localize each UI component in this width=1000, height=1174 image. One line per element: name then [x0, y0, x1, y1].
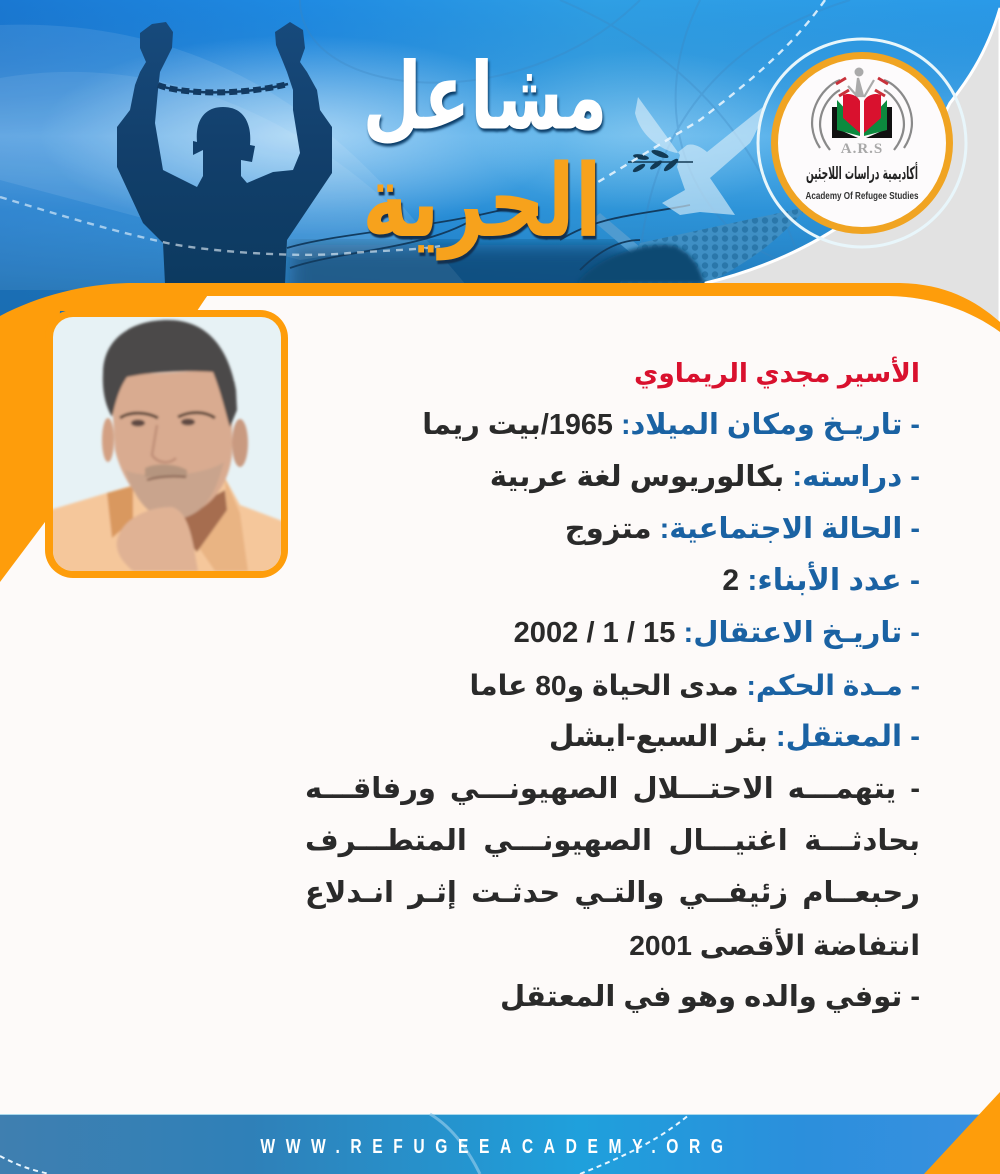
prisoner name: الأسير مجدي الريماوي — [634, 358, 920, 388]
prison: - المعتقل: بئر السبع-ايشل — [549, 720, 920, 753]
light arcs — [0, 0, 850, 290]
logo arabic name: أكاديمية دراسات اللاجئين — [806, 161, 918, 184]
dashed white lines — [0, 0, 825, 255]
gray corner — [700, 8, 1000, 340]
title word white: مشاعل — [363, 42, 607, 151]
handcuff chain — [158, 84, 288, 92]
prisoner silhouette — [117, 22, 332, 284]
footer bar — [0, 1092, 1000, 1174]
accusation paragraph line 2: بحادثـــة اغتيـــال الصهيونـــي المتطـــرف — [305, 825, 920, 857]
father note: - توفي والده وهو في المعتقل — [500, 981, 920, 1013]
accusation paragraph line 3: رحبعــام زئيفــي والتـي حدثـت إثـر انـدلاع — [305, 877, 920, 909]
title word orange: الحرية — [362, 142, 602, 260]
dove — [628, 97, 763, 215]
portrait — [50, 317, 285, 575]
logo badge — [756, 38, 968, 248]
title: مشاعل الحرية — [362, 42, 607, 264]
sky background — [0, 0, 1000, 340]
education: - دراسته: بكالوريوس لغة عربية — [490, 461, 920, 493]
children: - عدد الأبناء: 2 — [722, 564, 920, 597]
portrait photo frame — [45, 310, 288, 578]
footer corner triangle — [924, 1092, 1000, 1174]
header banner — [0, 0, 1000, 320]
arrest date: - تاريـخ الاعتقال: 15 / 1 / 2002 — [514, 617, 920, 649]
logo english name: Academy Of Refugee Studies — [806, 190, 919, 202]
birth: - تاريـخ ومكان الميلاد: 1965/بيت ريما — [422, 409, 920, 441]
barbed wire — [287, 205, 690, 270]
website url: WWW.REFUGEEACADEMY.ORG — [260, 1135, 734, 1157]
olive branch — [628, 148, 693, 174]
sentence: - مـدة الحكم: مدى الحياة و80 عاما — [470, 669, 920, 701]
accusation paragraph line 1: - يتهمـــه الاحتـــلال الصهيونـــي ورفاقـــه — [305, 773, 920, 805]
marital status: - الحالة الاجتماعية: متزوج — [565, 513, 920, 545]
fence and pole — [577, 207, 807, 284]
logo ARS text: A.R.S — [841, 141, 883, 157]
accusation paragraph line 4: انتفاضة الأقصى 2001 — [629, 929, 920, 961]
logo emblem — [806, 68, 919, 202]
